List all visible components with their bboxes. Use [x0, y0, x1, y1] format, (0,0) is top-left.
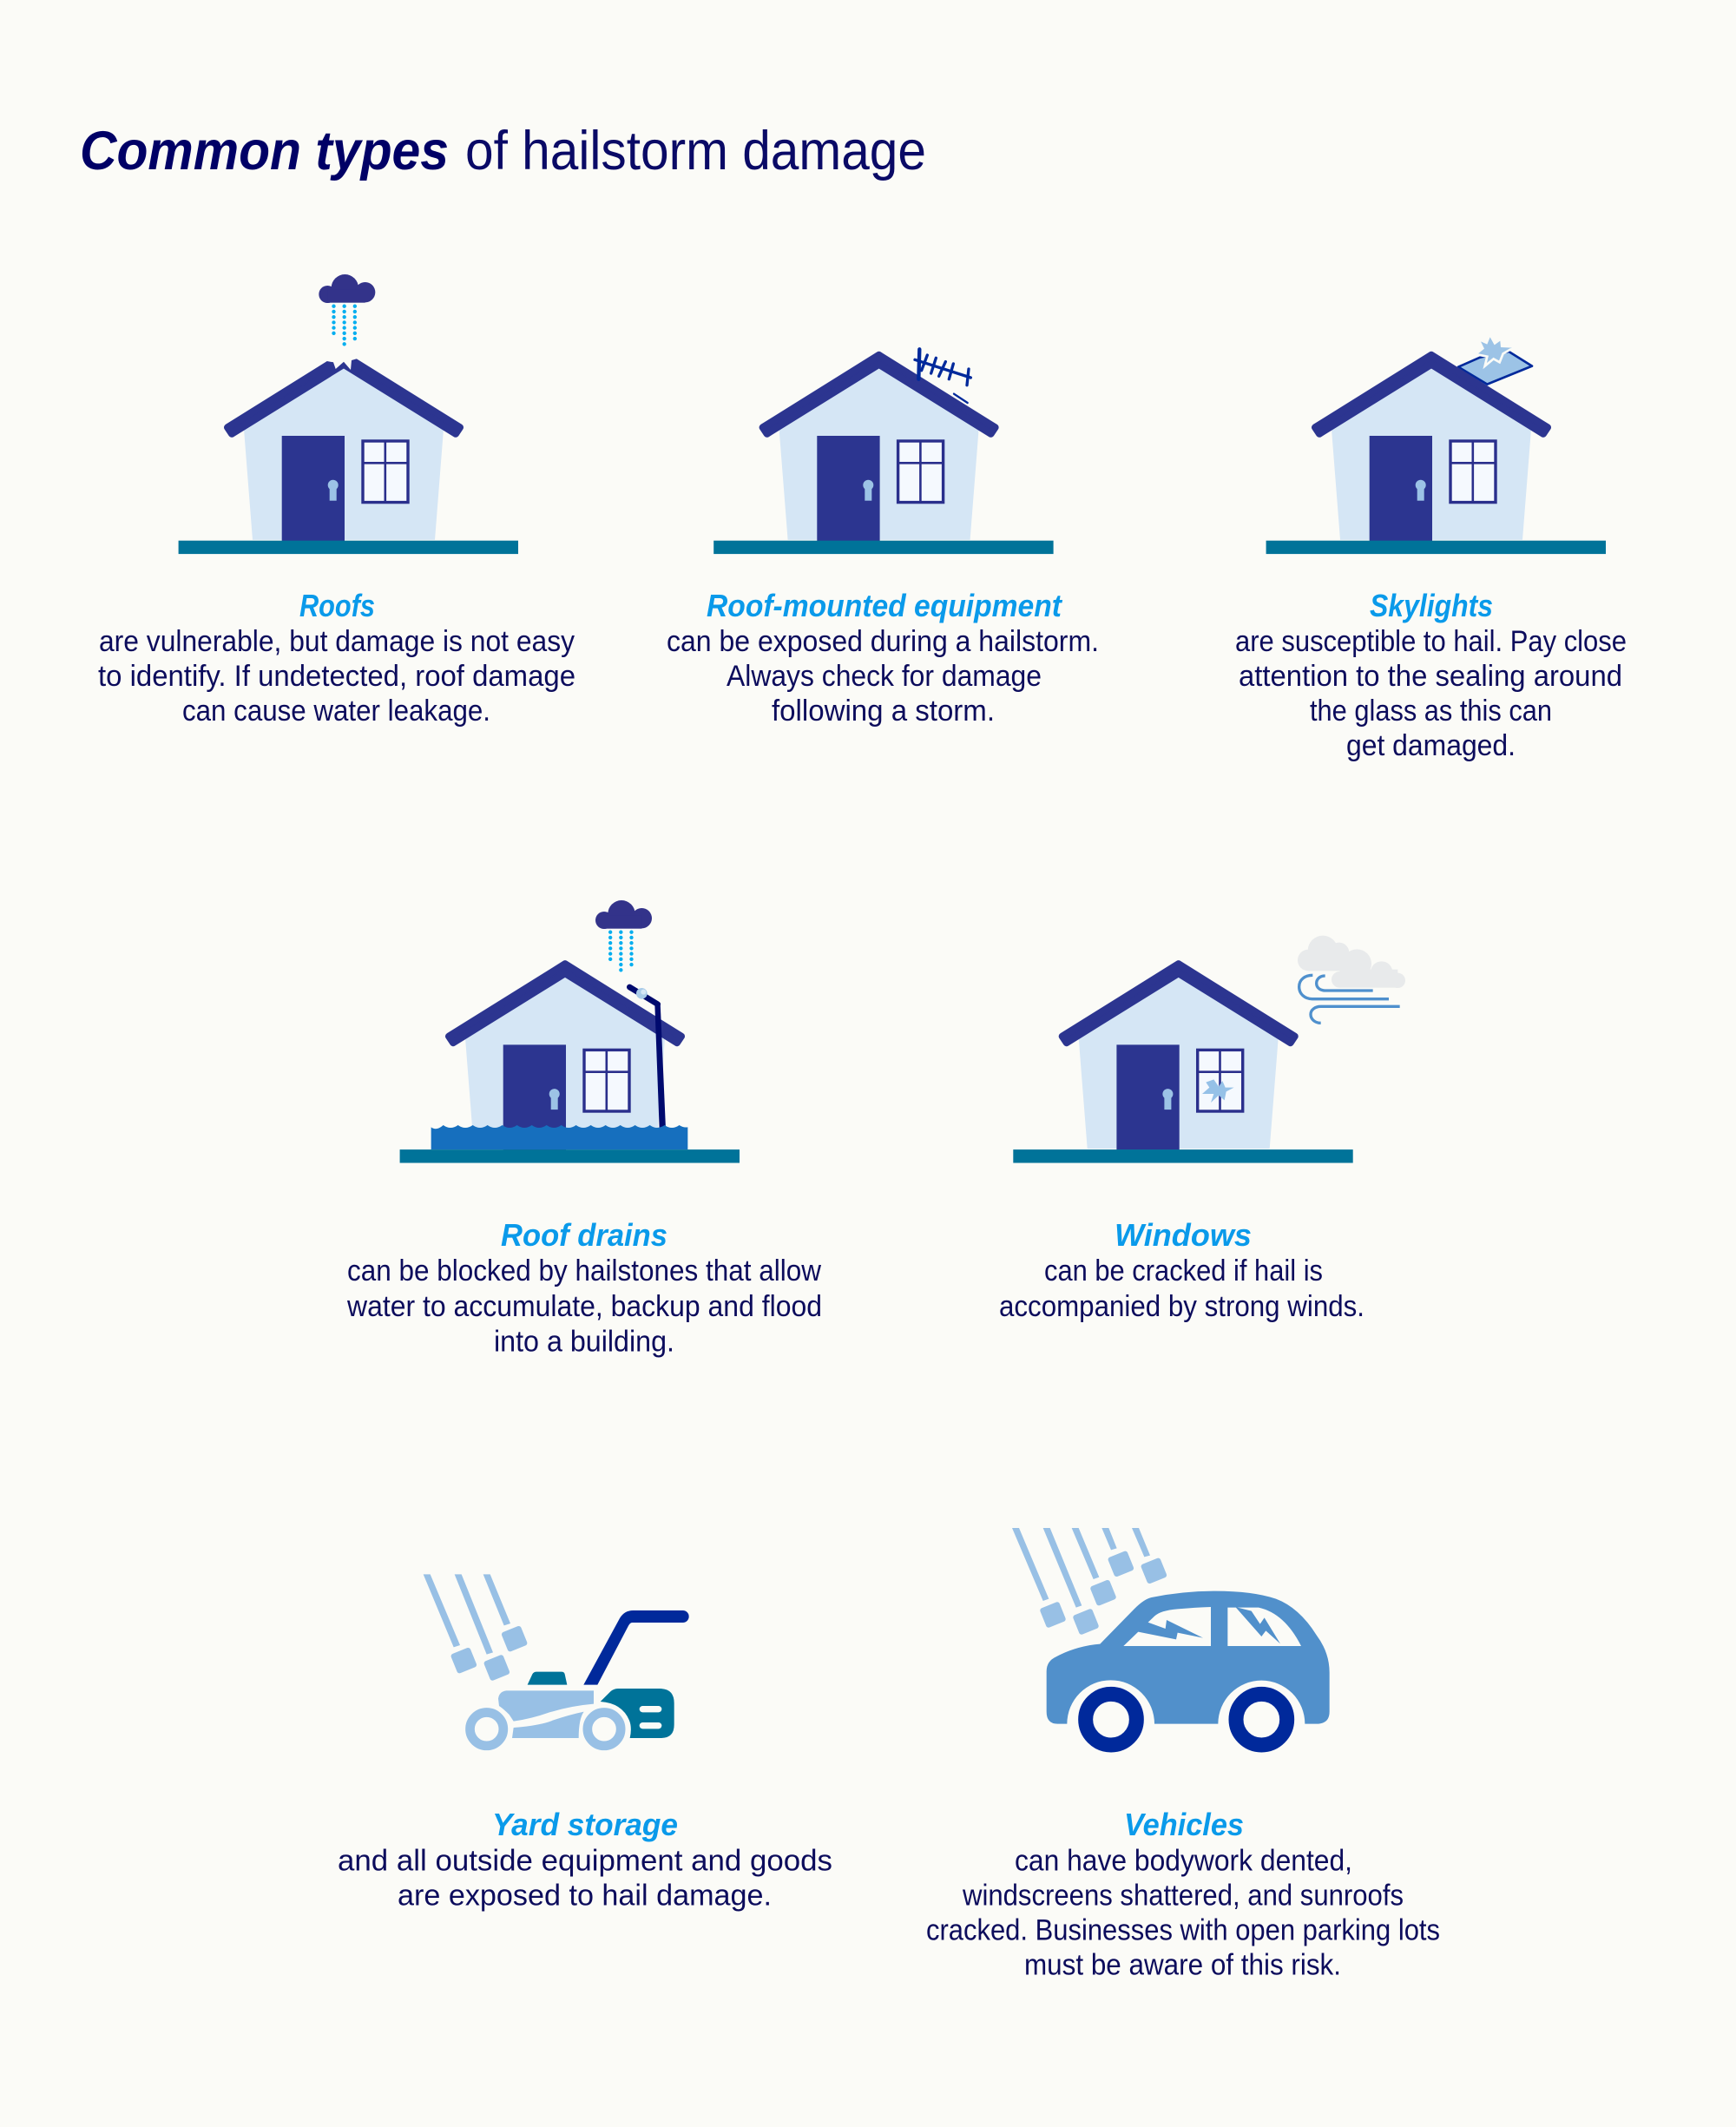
icon: rain cloud: [319, 274, 375, 348]
text: roofs: Roofs: [299, 588, 375, 623]
text: yard storage: are exposed to hail damage.: [398, 1879, 772, 1912]
house: [400, 964, 740, 1163]
icon: wind lines: [1299, 975, 1400, 1023]
window crack: [1202, 1079, 1234, 1103]
text: vehicles: must be aware of this risk.: [1024, 1948, 1341, 1981]
windscreen cracks: [1137, 1607, 1280, 1643]
house: [713, 355, 1054, 554]
text: roof-mounted equipment: can be exposed during a hailstorm.: [667, 625, 1099, 658]
icon: grey clouds: [1298, 936, 1405, 988]
text: roof drains: Roof drains: [501, 1217, 667, 1253]
mower handle: [583, 1610, 689, 1685]
car body: [1047, 1591, 1330, 1724]
text: skylights: the glass as this can: [1310, 695, 1552, 728]
text: roofs: can cause water leakage.: [182, 695, 490, 728]
text: roof-mounted equipment: Always check for damage: [727, 660, 1042, 693]
icon: rain cloud: [595, 900, 652, 974]
text: roofs: to identify. If undetected, roof damage: [98, 660, 575, 693]
text: vehicles: Vehicles: [1124, 1807, 1244, 1842]
text: vehicles: [926, 1807, 1440, 1981]
car wheels: [1086, 1694, 1287, 1745]
hail: [424, 1574, 528, 1682]
text: vehicles: windscreens shattered, and sunroofs: [962, 1879, 1404, 1912]
panel: skylights illustration: [1266, 337, 1606, 554]
title: of hailstorm damage: [465, 121, 926, 181]
text: yard storage: [338, 1807, 832, 1912]
panel: roof-mounted equipment illustration: [713, 349, 1054, 554]
icon: skylight: [1458, 352, 1532, 385]
text: roof drains: [346, 1217, 822, 1358]
panel: windows illustration: [1013, 936, 1405, 1163]
text: roof drains: water to accumulate, backup and flood: [346, 1290, 822, 1323]
text: roofs: are vulnerable, but damage is not easy: [99, 625, 575, 658]
text: windows: accompanied by strong winds.: [999, 1290, 1364, 1323]
text: windows: Windows: [1115, 1217, 1252, 1253]
text: windows: [999, 1217, 1364, 1323]
text: yard storage: Yard storage: [492, 1807, 678, 1842]
icon: drain pipe: [629, 987, 666, 1129]
text: roof-mounted equipment: Roof-mounted equipment: [707, 588, 1063, 623]
panel: roofs illustration: [179, 274, 518, 554]
text: vehicles: can have bodywork dented,: [1015, 1844, 1352, 1877]
mower wheels: [470, 1712, 621, 1746]
title: Common types: [80, 121, 449, 181]
house: [179, 355, 518, 554]
mower engine: [601, 1689, 674, 1738]
text: roof-mounted equipment: [667, 588, 1099, 728]
text: skylights: [1235, 588, 1627, 762]
text: roof drains: can be blocked by hailstones that allow: [347, 1254, 821, 1287]
text: vehicles: cracked. Businesses with open parking lots: [926, 1913, 1440, 1946]
icon: antenna: [915, 349, 970, 403]
house: [1013, 964, 1353, 1163]
hail: [1012, 1528, 1167, 1636]
panel: yard storage illustration: [424, 1574, 689, 1746]
text: skylights: attention to the sealing around: [1239, 660, 1622, 693]
title: [80, 121, 926, 181]
text: roofs: [98, 588, 575, 728]
text: roof-mounted equipment: following a storm.: [772, 695, 995, 728]
house: [1266, 355, 1606, 554]
text: skylights: are susceptible to hail. Pay close: [1235, 625, 1627, 658]
panel: vehicles illustration: [1012, 1528, 1330, 1745]
text: yard storage: and all outside equipment and goods: [338, 1844, 832, 1877]
flood water: [431, 1125, 687, 1149]
car windows: [1123, 1607, 1301, 1646]
mower body: [498, 1690, 594, 1738]
mower cap: [528, 1672, 567, 1685]
text: roof drains: into a building.: [494, 1325, 674, 1358]
roof crack: [323, 349, 358, 370]
panel: roof drains illustration: [400, 900, 740, 1163]
text: skylights: Skylights: [1370, 588, 1493, 623]
text: skylights: get damaged.: [1346, 729, 1516, 762]
icon: glass burst: [1477, 337, 1512, 366]
text: windows: can be cracked if hail is: [1044, 1254, 1323, 1287]
